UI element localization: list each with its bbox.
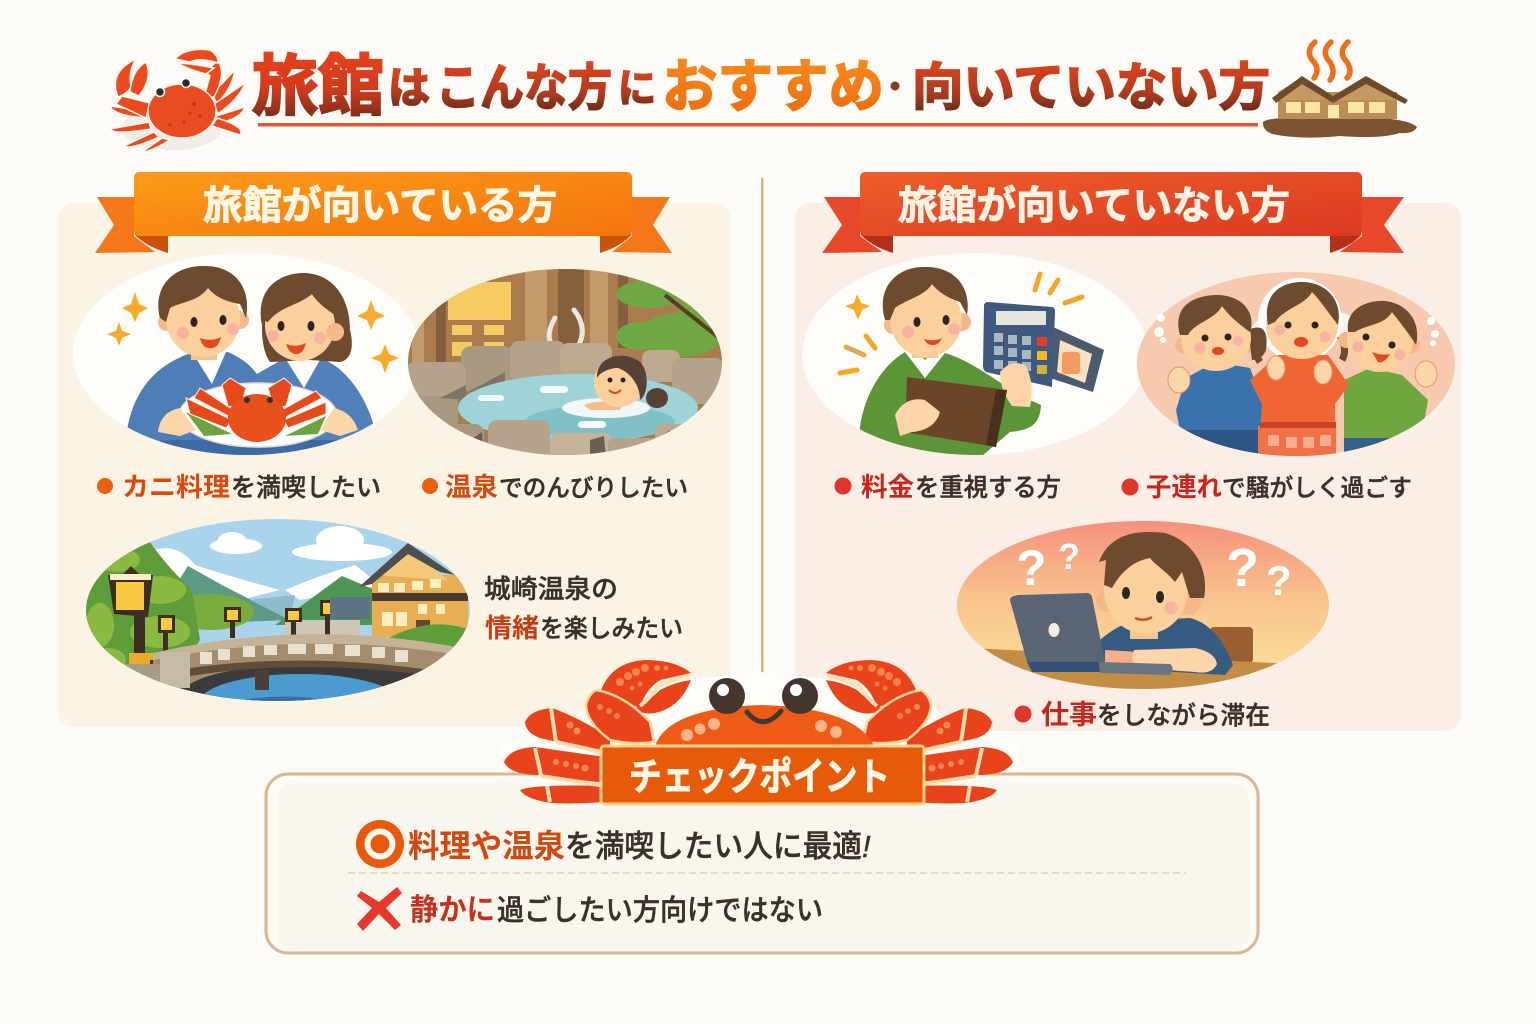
banner: checkpoint: チェックポイント [629,757,890,799]
label: crab cuisine [97,472,381,502]
child centre [1256,336,1345,362]
illustration: outdoor hot spring [404,268,726,463]
label: relax in hot spring: 温泉 [445,472,498,502]
title underline [258,123,1258,126]
man [158,313,176,331]
checkpoint row: not for quiet stays [357,887,823,931]
panel: unsuited guests background [795,203,1461,731]
label: relax in hot spring [422,472,688,502]
illustration: couple with crab dish [73,253,421,456]
label: working during stay [1014,700,1270,730]
ribbon: unsuited heading [822,172,1404,253]
title: おすすめ [662,55,884,119]
left legs and claw [504,660,691,804]
label: onsen town atmosphere: 城崎温泉の [484,574,618,604]
child right [1338,332,1354,348]
child left [1175,337,1191,353]
label: relax in hot spring: でのんびりしたい [499,475,688,502]
label: price-focused: 料金 [861,472,914,502]
checkpoint row: best for food and spa: 料理や温泉 [408,828,565,864]
woman [261,273,352,362]
illustration: working on a laptop: ? [1266,557,1292,604]
label: onsen town atmosphere [484,574,683,643]
label: price-focused: を重視する方 [915,474,1061,502]
right legs and claw [826,660,1013,804]
icon: ryokan with steam [1263,42,1417,138]
title: 旅館 [252,49,384,123]
label: noisy family: で騒がしく過ごす [1222,475,1412,502]
label: noisy family [1122,472,1412,502]
title: 向いていない方 [912,59,1270,116]
bridge [150,660,438,701]
checkpoint row: best for food and spa [356,820,871,868]
title: に [618,67,656,111]
checkpoint row: best for food and spa: を満喫したい人に最適 [565,829,862,864]
title [252,49,1270,123]
illustration: Kinosaki onsen town with bridge [86,519,470,701]
icon: red crab in title [110,49,245,152]
ribbon: unsuited heading: 旅館が向いていない方 [898,185,1290,228]
checkpoint row: not for quiet stays: 静かに [410,894,495,927]
title: は [388,65,430,113]
crab mascot [500,660,1020,804]
fists [1168,356,1437,393]
hands and plate with crab [179,383,337,447]
illustration: noisy children [1137,272,1455,456]
label: onsen town atmosphere: 情緒 [485,613,539,643]
title: こんな方 [436,60,612,116]
checkpoint row: not for quiet stays: 過ごしたい方向けではない [497,894,823,927]
checkpoint row: best for food and spa: ! [862,829,871,864]
panel: checkpoint box [266,774,1258,953]
sparkles [107,292,399,373]
illustration: working on a laptop: ? [1226,538,1259,598]
illustration: working on a laptop [957,521,1329,692]
banner: checkpoint [601,746,924,804]
label: onsen town atmosphere: を楽しみたい [540,615,683,643]
label: price-focused [834,472,1061,502]
label: working during stay: をしながら滞在 [1097,702,1270,730]
label: crab cuisine: カニ料理 [122,472,230,502]
ribbon: suited heading: 旅館が向いている方 [203,185,557,228]
label: working during stay: 仕事 [1041,700,1097,730]
illustration: working on a laptop: ? [1016,540,1047,596]
label: noisy family: 子連れ [1146,472,1222,502]
ribbon: suited heading [95,172,672,253]
illustration: man with calculator and wallet [802,253,1148,456]
ryokan building [372,575,468,637]
panel: suited guests background [58,203,731,727]
illustration: working on a laptop: ? [1058,536,1080,577]
label: crab cuisine: を満喫したい [231,474,381,502]
lanterns [108,566,337,657]
